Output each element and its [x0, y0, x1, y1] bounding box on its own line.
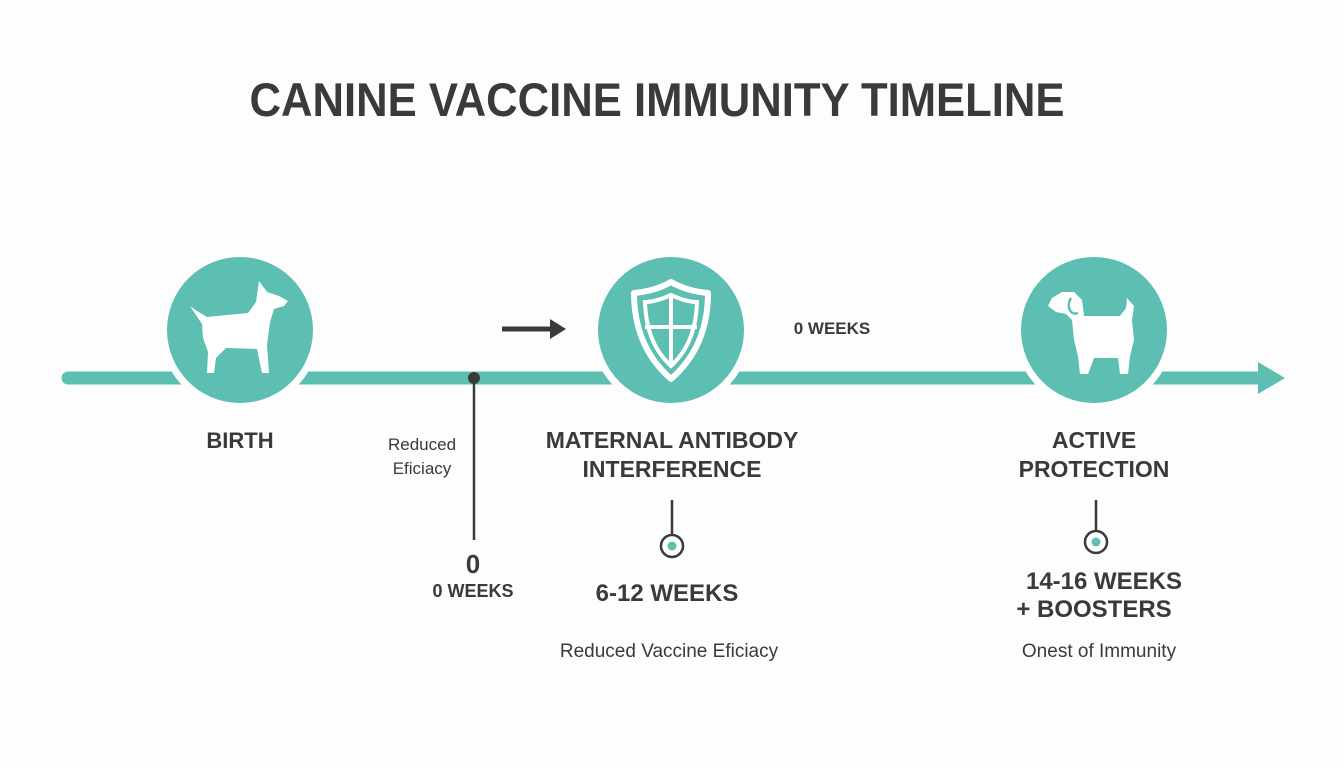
marker: 0 weeks: 0: [466, 549, 480, 579]
label: active protection: [1019, 427, 1169, 482]
marker: 14-16 weeks: [1016, 500, 1182, 662]
marker: 0 weeks: Eficiacy: [393, 459, 452, 478]
marker: 6-12 weeks: [560, 500, 779, 662]
marker: 6-12 weeks: Reduced Vaccine Eficiacy: [560, 641, 779, 662]
marker: 14-16 weeks: Onest of Immunity: [1022, 641, 1177, 662]
label: maternal antibody interference: INTERFERENCE: [583, 456, 761, 482]
title: CANINE VACCINE IMMUNITY TIMELINE: [250, 73, 1064, 126]
marker: 14-16 weeks: 14-16 WEEKS: [1026, 568, 1182, 595]
label: active protection: PROTECTION: [1019, 456, 1169, 482]
marker: 6-12 weeks: 6-12 WEEKS: [596, 580, 738, 607]
label: birth: BIRTH: [206, 428, 274, 453]
icon: birth dog: [160, 250, 320, 410]
marker: 14-16 weeks: + BOOSTERS: [1016, 596, 1172, 623]
label: maternal antibody interference: MATERNAL ANTIBODY: [546, 427, 798, 453]
label: active protection: ACTIVE: [1052, 427, 1136, 453]
label: 0 weeks top: 0 WEEKS: [794, 319, 870, 338]
marker: 0 weeks: Reduced: [388, 435, 456, 454]
arrow: black: [502, 319, 566, 339]
label: maternal antibody interference: [546, 427, 798, 482]
timeline arrow: [68, 362, 1285, 394]
icon: shield: [591, 250, 751, 410]
marker: 0 weeks: [388, 372, 514, 601]
icon: puppy: [1014, 250, 1174, 410]
marker: 0 weeks: 0 WEEKS: [432, 581, 514, 601]
